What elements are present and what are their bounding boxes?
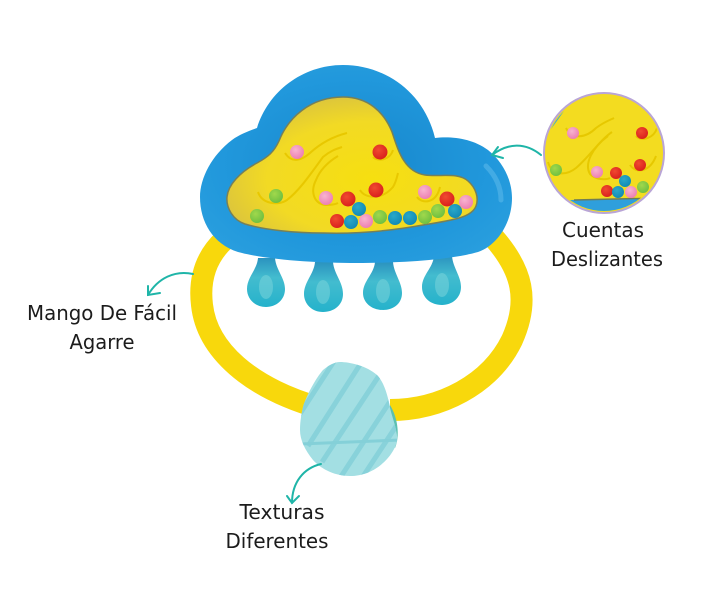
- bead tracks: [258, 133, 440, 205]
- label: easy grip handle: Mango De Fácil: [27, 301, 177, 325]
- arrow: to cloud: [492, 146, 541, 158]
- label: different textures: Texturas: [238, 500, 324, 524]
- rain drops: [247, 256, 461, 312]
- label: easy grip handle: [27, 301, 177, 354]
- cloud rattle body: [200, 65, 512, 263]
- handle ring: [201, 238, 522, 410]
- beads: [250, 144, 473, 229]
- label: different textures: Diferentes: [226, 529, 328, 553]
- label: sliding beads: Deslizantes: [551, 247, 663, 271]
- arrow: to texture label: [287, 464, 321, 503]
- bead window: [227, 97, 477, 233]
- label: sliding beads: Cuentas: [562, 218, 644, 242]
- label: different textures: [226, 500, 328, 553]
- arrow: to handle label: [148, 273, 193, 295]
- teether with diagonal texture: [300, 362, 398, 476]
- label: easy grip handle: Agarre: [70, 330, 134, 354]
- magnified detail circle: [544, 93, 664, 215]
- label: sliding beads: [551, 218, 663, 271]
